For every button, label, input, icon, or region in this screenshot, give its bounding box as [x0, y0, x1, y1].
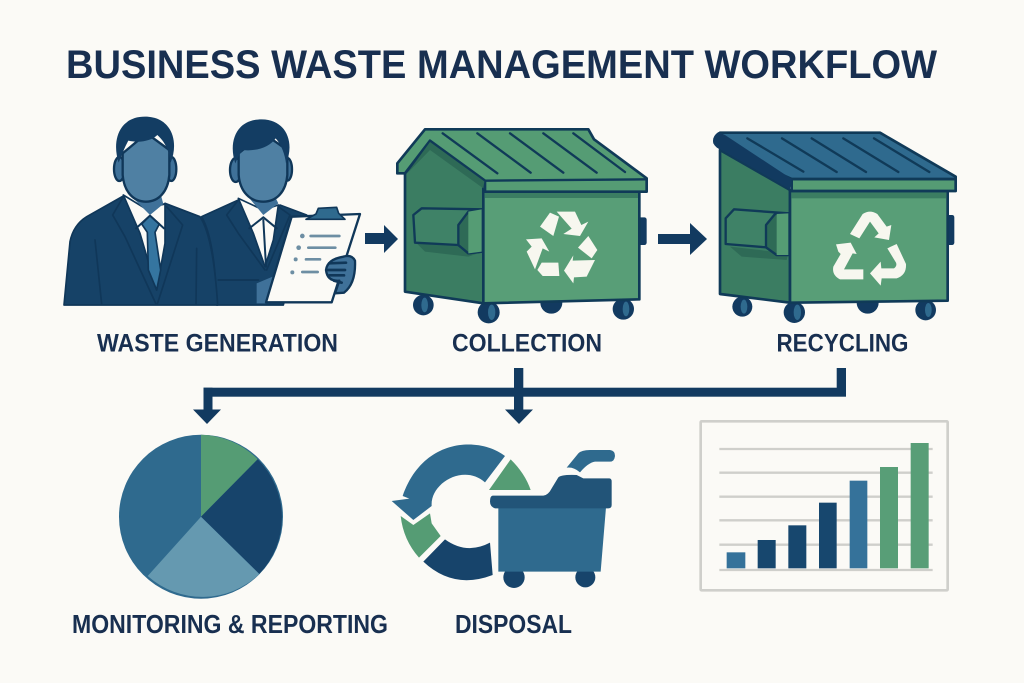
connector arrows	[193, 368, 846, 424]
side panel	[720, 150, 790, 303]
icon: green dumpster	[397, 129, 647, 323]
side panel	[405, 143, 483, 303]
arrow: collection to recycling	[658, 223, 707, 255]
left hand sleeve	[257, 277, 273, 303]
icon: business people with clipboard	[64, 117, 360, 305]
chart: pie monitoring	[119, 435, 283, 599]
lid	[397, 129, 647, 192]
person: second employee	[202, 119, 307, 305]
label: monitoring and reporting: MONITORING & REPORTING	[72, 609, 388, 639]
arrow: generation to collection	[365, 225, 398, 253]
lid	[713, 132, 956, 191]
necktie	[142, 216, 161, 290]
icon: disposal cycle and bin	[392, 445, 615, 588]
wheels	[732, 292, 936, 323]
chart: bar growth	[701, 421, 948, 590]
clipboard	[266, 207, 360, 302]
front panel	[790, 191, 948, 303]
wheels	[413, 292, 634, 323]
icon: blue-lid recycling dumpster	[713, 132, 956, 323]
right tab	[637, 217, 647, 245]
label: disposal: DISPOSAL	[455, 609, 572, 639]
label: waste generation: WASTE GENERATION	[97, 330, 338, 358]
label: collection: COLLECTION	[452, 330, 602, 358]
waste bin	[490, 450, 615, 588]
side handle	[413, 208, 483, 257]
recycling symbol	[833, 212, 906, 286]
right tab	[945, 215, 954, 245]
cycle arrows	[392, 445, 531, 580]
recycling symbol	[526, 212, 597, 283]
front panel	[483, 192, 639, 303]
label: recycling: RECYCLING	[776, 330, 908, 358]
side handle	[726, 209, 788, 260]
hand holding clipboard	[326, 256, 355, 293]
person: first employee	[64, 117, 218, 305]
title: BUSINESS WASTE MANAGEMENT WORKFLOW	[66, 43, 937, 87]
